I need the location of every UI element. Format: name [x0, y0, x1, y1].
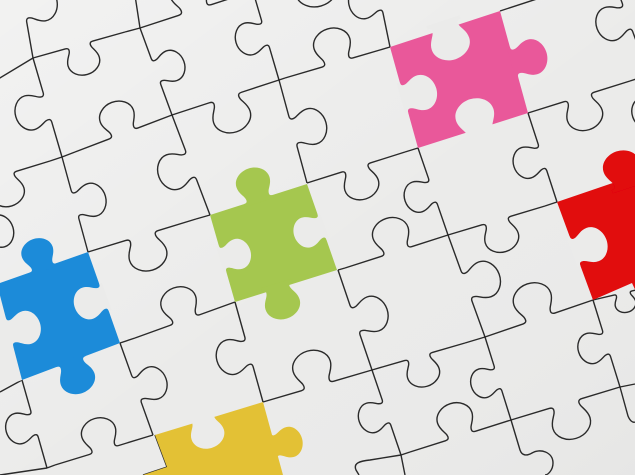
hole: yellow [143, 402, 306, 475]
hole: green [210, 163, 337, 324]
hole: red [557, 146, 635, 300]
hole: pink [390, 11, 551, 148]
hole: blue [0, 234, 120, 399]
